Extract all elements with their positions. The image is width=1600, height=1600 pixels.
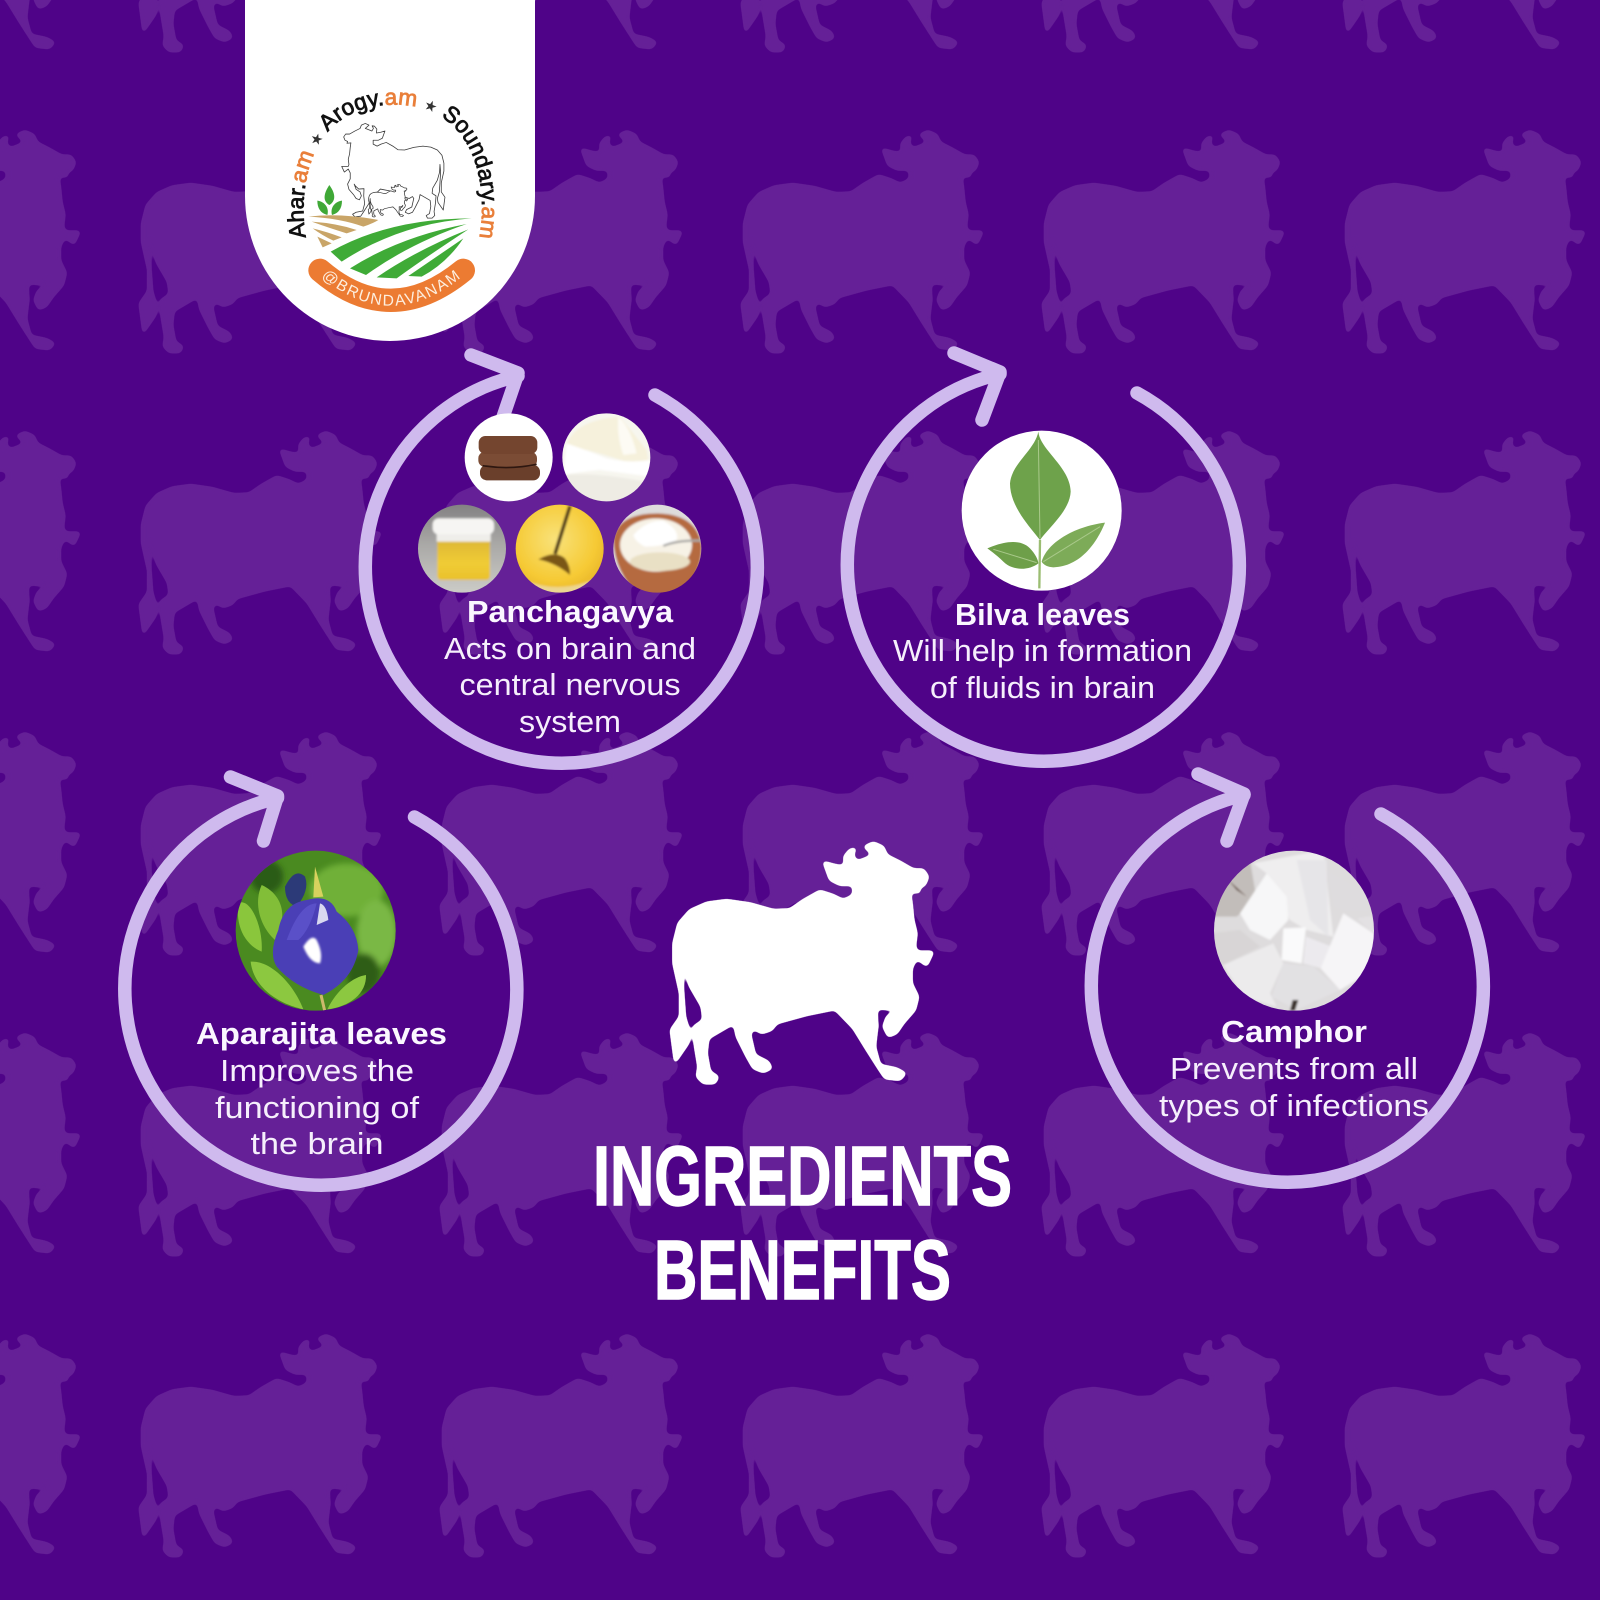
description: Will help in formation <box>893 633 1192 668</box>
description: Acts on brain and <box>444 631 696 666</box>
description: functioning of <box>215 1090 419 1125</box>
title: BENEFITS <box>654 1223 951 1317</box>
circular tagline: Ahar.am ★ Arogy.am ★ Soundary. am <box>286 92 494 238</box>
photo: aparajita flower <box>233 850 398 1013</box>
ring arrow <box>365 355 757 763</box>
ring arrow <box>1091 774 1483 1182</box>
icon: white cow <box>671 842 933 1083</box>
description: types of infections <box>1159 1088 1429 1123</box>
description <box>215 1053 419 1161</box>
banner text: @BRUNDAVANAM <box>323 270 460 306</box>
sprout <box>317 185 342 215</box>
panel: Bilva leaves <box>847 353 1239 761</box>
description: system <box>519 704 621 739</box>
photo: gomutra jar <box>418 504 506 593</box>
photo: curd <box>613 504 702 593</box>
description <box>444 631 696 739</box>
description <box>893 633 1192 705</box>
heading: Bilva leaves <box>955 597 1130 632</box>
panel: Camphor <box>1091 774 1483 1182</box>
description: Prevents from all <box>1170 1051 1418 1086</box>
tan field <box>308 215 378 247</box>
white tab <box>245 0 535 341</box>
panel: Panchagavya <box>365 355 757 763</box>
title <box>593 1129 1012 1317</box>
logo: Brundavanam <box>286 92 494 312</box>
description: the brain <box>250 1126 384 1161</box>
photo: dung cakes <box>463 412 553 502</box>
heading: Camphor <box>1221 1014 1367 1049</box>
photo: bilva leaf <box>962 431 1122 591</box>
description: central nervous <box>460 667 680 702</box>
line art: cow <box>342 123 445 218</box>
heading: Aparajita leaves <box>196 1016 447 1051</box>
title: INGREDIENTS <box>593 1129 1012 1223</box>
description <box>1159 1051 1429 1123</box>
panel: Aparajita leaves <box>125 777 517 1185</box>
description: of fluids in brain <box>930 670 1155 705</box>
green field <box>331 218 472 278</box>
photo: milk <box>562 413 650 502</box>
description: Improves the <box>220 1053 414 1088</box>
heading: Panchagavya <box>467 594 674 629</box>
logo panel <box>245 0 535 341</box>
line art: calf <box>368 184 408 217</box>
ring arrow <box>847 353 1239 761</box>
photo: ghee <box>516 504 604 593</box>
ring arrow <box>125 777 517 1185</box>
photo: camphor <box>1214 850 1374 1011</box>
orange banner <box>320 270 463 300</box>
